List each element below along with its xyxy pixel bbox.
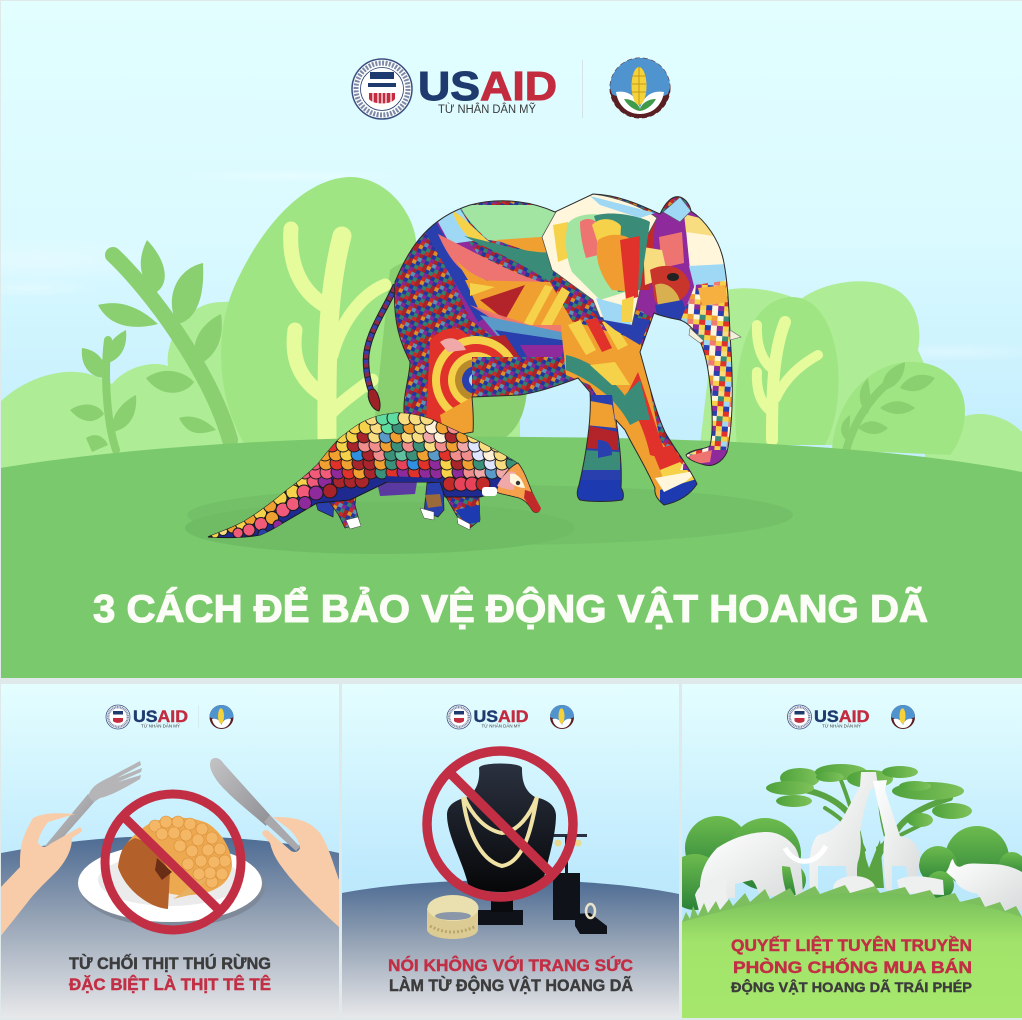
front legs xyxy=(560,310,700,510)
hill and grass xyxy=(682,885,1022,1018)
display table xyxy=(342,880,679,1018)
seal xyxy=(106,705,130,729)
elephant tail xyxy=(366,285,396,411)
yellow plant right xyxy=(757,322,818,440)
caption xyxy=(388,956,633,995)
wordmark: USAID xyxy=(474,708,529,726)
caption: PHÒNG CHỐNG MUA BÁN xyxy=(733,957,972,977)
necklaces xyxy=(463,797,537,866)
pangolin head xyxy=(482,463,541,512)
yellow plant left xyxy=(291,229,385,445)
caption: TỪ CHỐI THỊT THÚ RỪNG xyxy=(69,953,271,973)
right hand xyxy=(262,817,339,927)
knife xyxy=(210,758,300,851)
cooked pangolin xyxy=(118,816,232,909)
tagline: TỪ NHÂN DÂN MỸ xyxy=(482,722,520,728)
caption: LÀM TỪ ĐỘNG VẬT HOANG DÃ xyxy=(389,975,633,995)
plate xyxy=(78,844,265,927)
panel: main poster xyxy=(0,1,1022,678)
seal xyxy=(447,705,471,729)
white elephant xyxy=(700,832,803,898)
ground shadows xyxy=(185,485,793,554)
logos xyxy=(447,705,574,729)
divider xyxy=(582,60,583,118)
sky xyxy=(1,684,339,853)
acacia tree xyxy=(766,764,972,888)
emblem xyxy=(550,705,574,729)
trunk xyxy=(680,280,735,470)
elephant outline xyxy=(394,194,732,505)
panel: anti-trafficking communication xyxy=(667,684,1022,1018)
left leaf plants xyxy=(70,240,230,452)
wordmark: USAID xyxy=(814,708,870,726)
illustration: colourful pangolin xyxy=(208,411,541,539)
small white animals xyxy=(695,876,944,915)
pangolin body xyxy=(208,413,526,538)
logos xyxy=(106,705,234,729)
background bushes xyxy=(667,816,1022,910)
caption: NÓI KHÔNG VỚI TRANG SỨC xyxy=(388,956,633,975)
white giraffe right xyxy=(873,780,920,890)
panel: refuse bushmeat xyxy=(0,684,339,1018)
ring box xyxy=(575,904,607,934)
USAID logo main xyxy=(352,58,670,119)
left hand xyxy=(0,813,82,937)
prohibition sign xyxy=(427,751,573,897)
white rhinoceros xyxy=(946,859,1022,910)
seal xyxy=(788,705,812,729)
giraffe tail and elephant trunk xyxy=(785,846,826,861)
bangle xyxy=(427,895,478,939)
tagline: TỪ NHÂN DÂN MỸ xyxy=(438,103,536,116)
caption xyxy=(69,953,271,994)
right leaf plant xyxy=(841,362,935,455)
caption xyxy=(731,936,972,995)
table xyxy=(1,836,339,1018)
sky xyxy=(342,684,679,1018)
caption: ĐỘNG VẬT HOANG DÃ TRÁI PHÉP xyxy=(731,978,972,995)
wordmark: USAID xyxy=(133,708,188,726)
caption: ĐẶC BIỆT LÀ THỊT TÊ TÊ xyxy=(69,975,271,994)
logos xyxy=(788,705,915,729)
clouds xyxy=(0,169,1022,362)
rear leg rainbow xyxy=(426,328,562,434)
panel: no wildlife jewellery xyxy=(342,684,679,1018)
sky background xyxy=(1,1,1022,457)
caption: QUYẾT LIỆT TUYÊN TRUYỀN xyxy=(731,936,972,955)
pangolin legs xyxy=(316,482,480,530)
title: 3 CÁCH ĐỂ BẢO VỆ ĐỘNG VẬT HOANG DÃ xyxy=(93,586,928,631)
sky xyxy=(682,684,1022,1018)
tagline: TỪ NHÂN DÂN MỸ xyxy=(141,722,180,728)
tagline: TỪ NHÂN DÂN MỸ xyxy=(822,722,861,728)
illustration: colourful elephant xyxy=(366,190,741,510)
emblem xyxy=(891,705,915,729)
pangolin scales xyxy=(211,411,520,539)
agriculture emblem xyxy=(610,58,670,118)
white giraffe left xyxy=(809,772,878,892)
elephant body xyxy=(380,190,740,510)
USAID wordmark: USAID xyxy=(418,63,557,109)
background bushes xyxy=(0,177,1022,480)
head xyxy=(636,212,726,320)
elephant tusks xyxy=(689,328,741,343)
seal xyxy=(352,59,412,119)
ear xyxy=(542,194,691,325)
fork xyxy=(45,761,142,850)
necklace bust xyxy=(447,764,556,925)
prohibition sign xyxy=(105,794,241,930)
ground hill xyxy=(0,437,1022,678)
emblem xyxy=(210,705,234,729)
earring stand and box xyxy=(547,834,587,920)
